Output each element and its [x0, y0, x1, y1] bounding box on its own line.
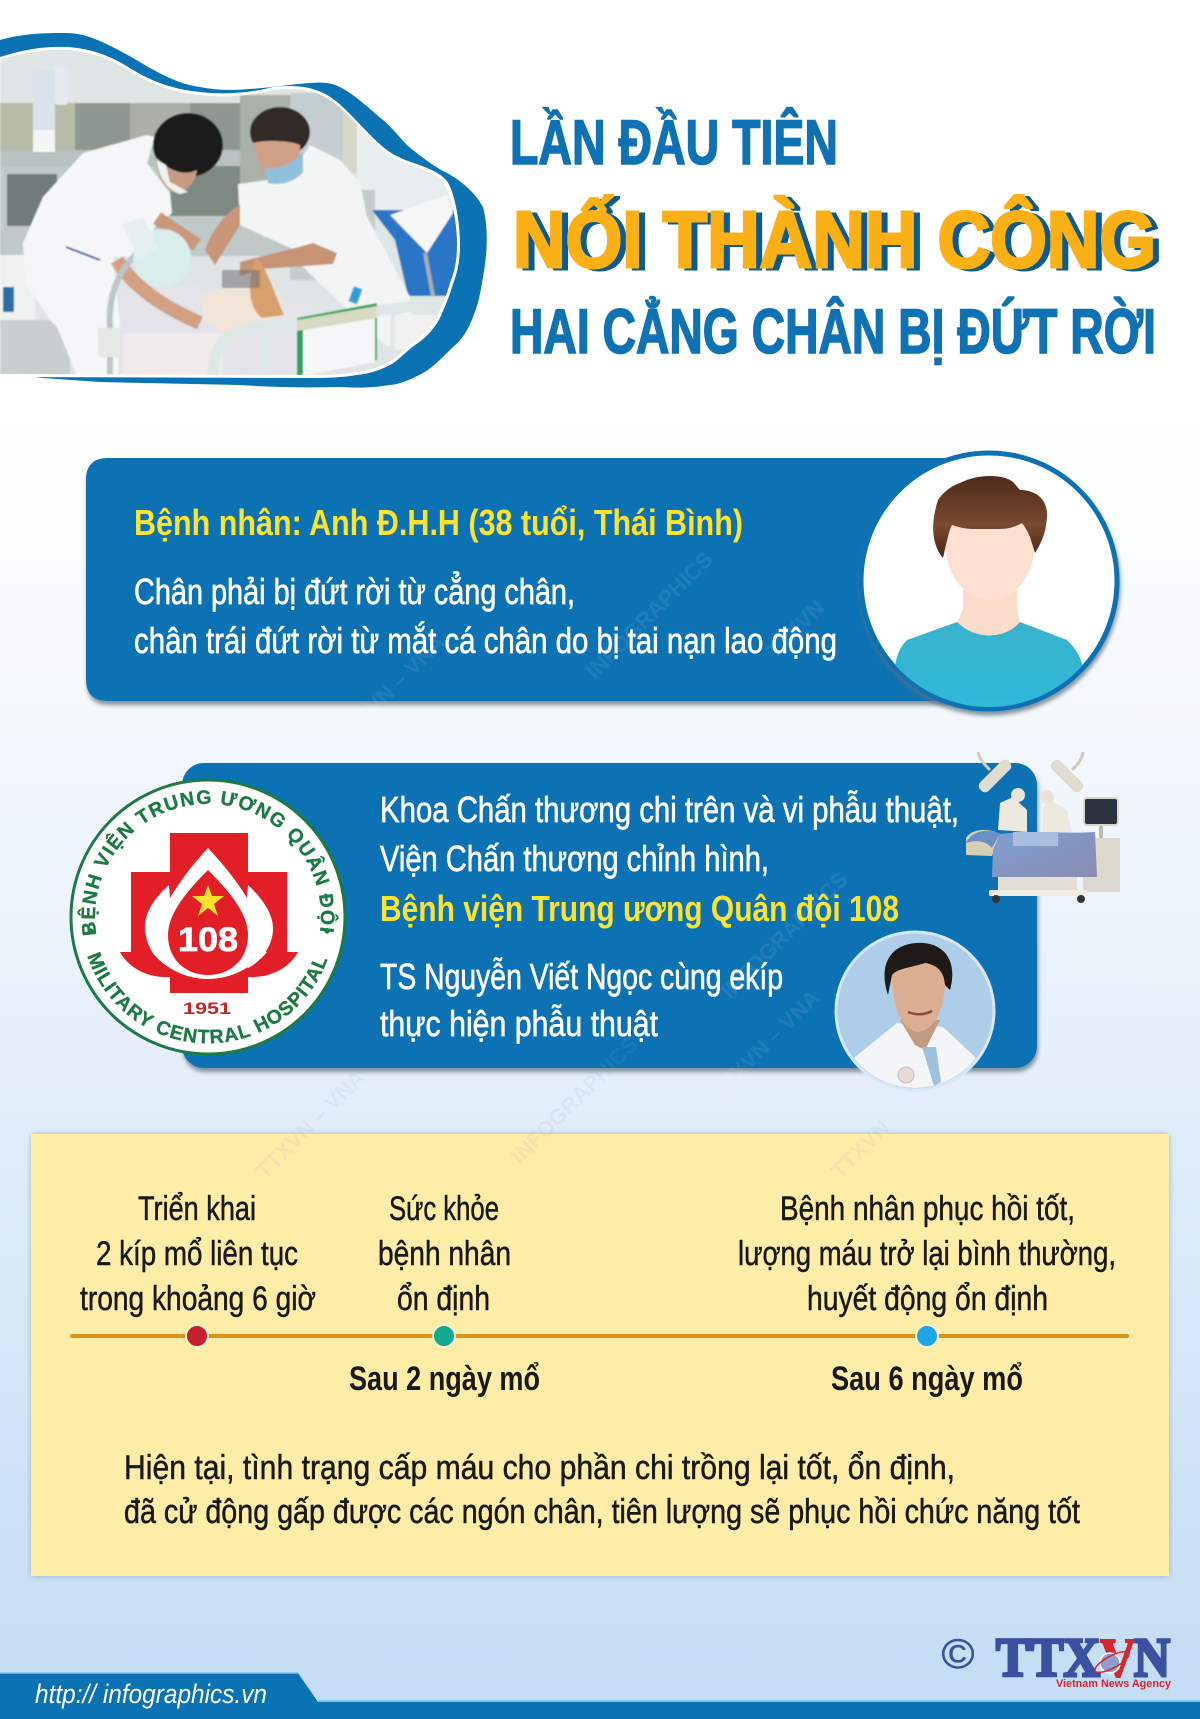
icon: patient avatar — [861, 453, 1117, 730]
logo: Military Central Hospital 108 — [70, 778, 346, 1056]
footer tab — [0, 1673, 318, 1719]
watermarks: INFOGRAPHICS — [581, 547, 718, 684]
timeline panel background — [31, 1134, 1169, 1576]
step: after 6 days — [738, 1190, 1116, 1398]
header photo in blue blob — [0, 33, 487, 388]
step: after 6 days: Bệnh nhân phục hồi tốt, — [780, 1190, 1075, 1228]
wall — [0, 40, 470, 380]
watermarks: TTXVN — [826, 1115, 895, 1184]
logo ring text — [77, 790, 339, 1044]
timeline axis — [72, 1334, 1127, 1338]
patient description — [134, 570, 837, 661]
icon: operating room illustration — [966, 752, 1120, 903]
footer url: http:// infographics.vn — [35, 1679, 267, 1709]
sheet and blanket — [120, 285, 360, 380]
logo ring text: MILITARY CENTRAL HOSPITAL — [87, 952, 328, 1044]
patient dressing and foot — [200, 288, 285, 335]
copyright symbol: © — [942, 1630, 975, 1677]
hospital description — [380, 789, 959, 879]
patient description: chân trái đứt rời từ mắt cá chân do bị tai nạn lao động — [134, 620, 837, 661]
watermarks: INFOGRAPHICS — [716, 867, 853, 1004]
surgical team text: TS Nguyễn Viết Ngọc cùng ekíp — [380, 956, 783, 997]
watermarks: TTXVN – VNA — [251, 1065, 370, 1184]
panel: timeline — [31, 1134, 1169, 1576]
IV bags — [32, 102, 56, 130]
patient panel background — [86, 458, 950, 701]
watermarks — [251, 547, 895, 1184]
arm of right doctor — [205, 205, 240, 265]
patient description: Chân phải bị đứt rời từ cẳng chân, — [134, 570, 575, 612]
title — [510, 107, 1162, 367]
footer line — [0, 1702, 1200, 1719]
panel: patient — [86, 453, 1117, 730]
watermarks: TTXVN — [761, 595, 830, 664]
agency tagline: Vietnam News Agency — [1056, 1678, 1172, 1690]
agency wordmark — [996, 1627, 1170, 1688]
step: after 2 days: Sức khỏe — [389, 1190, 499, 1228]
logo lotus — [145, 848, 273, 979]
doctor right — [238, 107, 415, 350]
medical photo — [0, 40, 470, 380]
step: after 6 days: huyết động ổn định — [807, 1280, 1048, 1318]
blue cabinet — [372, 210, 460, 296]
copyright logo TTXVN — [942, 1627, 1172, 1690]
doctor left — [23, 113, 223, 376]
agency wordmark: V — [1100, 1627, 1136, 1688]
blue strap — [349, 286, 362, 304]
step: surgery: trong khoảng 6 giờ — [80, 1280, 316, 1318]
step: after 2 days — [349, 1190, 540, 1398]
globe emblem — [1092, 1648, 1132, 1676]
surgical team text — [380, 956, 783, 1044]
monitor — [262, 236, 266, 238]
blue blob frame — [0, 33, 487, 388]
agency wordmark: TTX — [996, 1627, 1100, 1688]
white inner edge — [0, 47, 460, 378]
left lamp — [110, 253, 137, 376]
step: after 2 days: Sau 2 ngày mổ — [349, 1360, 540, 1398]
agency wordmark: N — [1134, 1627, 1170, 1688]
watermarks: TTXVN – VNA — [706, 985, 825, 1104]
patient heading: Bệnh nhân: Anh Đ.H.H (38 tuổi, Thái Bình) — [134, 502, 743, 543]
hospital panel background — [182, 763, 1037, 1068]
step: after 6 days: lượng máu trở lại bình thường, — [738, 1235, 1116, 1273]
step: after 2 days: bệnh nhân — [378, 1235, 511, 1273]
doctor portrait — [836, 932, 994, 1095]
logo cross — [131, 833, 287, 993]
hospital name: Bệnh viện Trung ương Quân đội 108 — [380, 888, 899, 929]
watermarks: INFOGRAPHICS — [506, 1032, 643, 1169]
logo ring text: BỆNH VIỆN TRUNG ƯƠNG QUÂN ĐỘI — [77, 790, 339, 936]
title line 1: LẦN ĐẦU TIÊN — [510, 107, 838, 178]
current status text — [124, 1449, 1080, 1531]
current status text: Hiện tại, tình trạng cấp máu cho phần chi trồng lại tốt, ổn định, — [124, 1449, 955, 1487]
step: surgery: 2 kíp mổ liên tục — [96, 1235, 298, 1273]
step: after 6 days: Sau 6 ngày mổ — [831, 1360, 1023, 1398]
title line 2 highlighted: NỐI THÀNH CÔNG — [513, 195, 1156, 284]
clipboard — [297, 303, 377, 376]
bed rail — [208, 301, 412, 374]
logo: Military Central Hospital 108: 108 — [178, 921, 238, 959]
right lamp — [425, 253, 433, 296]
step: after 2 days: ổn định — [397, 1280, 490, 1318]
panel: hospital — [70, 752, 1120, 1092]
footer band — [0, 1673, 1200, 1719]
step: surgery — [80, 1190, 316, 1347]
hospital description: Viện Chấn thương chỉnh hình, — [380, 838, 769, 879]
watermarks: TTXVN – VNA — [331, 630, 450, 749]
surgical team text: thực hiện phẫu thuật — [380, 1003, 658, 1044]
logo: Military Central Hospital 108: 1951 — [183, 999, 231, 1018]
step: surgery: Triển khai — [138, 1190, 256, 1228]
hospital description: Khoa Chấn thương chi trên và vi phẫu thuật, — [380, 789, 959, 830]
